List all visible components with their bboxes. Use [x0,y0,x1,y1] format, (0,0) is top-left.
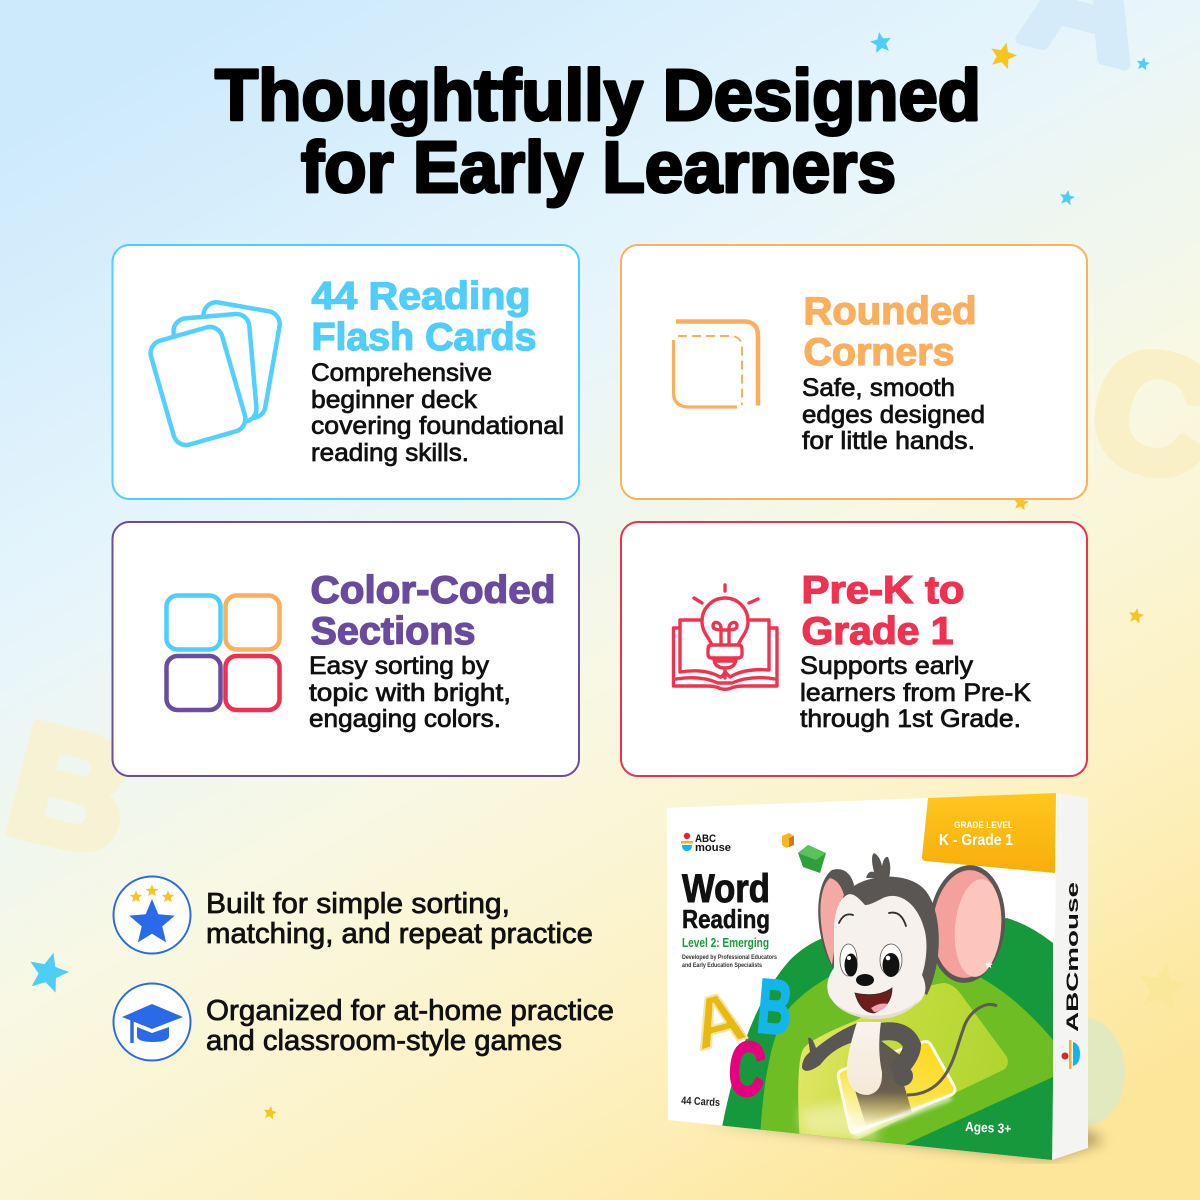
tail [907,1004,997,1095]
nose [856,974,874,986]
mouse mascot [802,853,1010,1126]
right ear [924,862,1010,986]
heading: Grade 1 [802,610,954,653]
cubes [782,833,826,873]
panel: 44 reading flash cards [112,245,579,499]
eyes [840,944,857,976]
box front [667,793,1057,1160]
title: for Early Learners [301,128,896,208]
text block: engaging colors. [309,705,501,733]
heading: Color-Coded [310,569,556,612]
text block [800,652,1031,733]
text: organized [206,995,614,1057]
face [827,894,926,1019]
tag: grade level: K - Grade 1 [939,832,1013,849]
box title: Developed by Professional Educators [682,955,778,961]
panel: rounded corners [621,245,1087,499]
logo: ABC mouse: mouse [695,842,731,854]
heading: Pre-K to [802,569,964,612]
text block: Supports early [800,652,974,680]
chin shadow [832,993,925,1019]
tag: grade level: GRADE LEVEL [954,820,1013,830]
text block: learners from Pre-K [800,679,1031,707]
title: Thoughtfully Designed [215,56,981,136]
text block: Safe, smooth [802,374,955,402]
box title: and Early Education Specialists [682,963,763,969]
heading: Corners [804,331,954,374]
icon: stars badge [114,876,190,954]
text block: topic with bright, [309,679,511,707]
left ear [818,869,854,968]
box title [682,867,778,969]
right arm [880,1031,912,1068]
text: sorting [206,888,593,950]
heading [804,290,976,374]
icon: rounded corner [674,322,758,407]
brows [839,913,906,926]
title [215,56,981,208]
side logo [1062,1040,1080,1069]
text block: covering foundational [311,412,564,440]
text block: Easy sorting by [309,652,490,680]
text: organized: and classroom-style games [206,1025,562,1057]
panel: color-coded sections [112,522,579,776]
tag: grade level [922,793,1056,873]
white base glow [852,1095,952,1138]
head [843,877,939,995]
heading: Rounded [804,290,976,333]
icon: book with lightbulb [674,585,777,689]
text block: edges designed [802,401,985,429]
letters A B C: C [725,1026,769,1113]
left arm [802,1022,862,1071]
text block [309,652,511,733]
text: ages: Ages 3+ [965,1119,1012,1136]
body [847,1022,882,1095]
text: sorting: Built for simple sorting, [206,888,510,920]
logo: ABC mouse [681,833,731,854]
box title: Word [682,867,770,911]
text block [802,374,985,455]
text block: beginner deck [311,386,478,414]
side text: ABCmouse [1063,882,1082,1032]
icon: four colored squares [166,596,280,710]
text: 44 cards: 44 Cards [681,1095,720,1109]
icon: graduation cap badge [114,984,190,1060]
heading [312,275,536,359]
tuft [866,853,890,878]
heading: Flash Cards [312,316,536,359]
box side [1052,793,1088,1160]
heading: Sections [310,610,476,653]
text block [311,359,564,467]
letters A B C [683,964,795,1113]
box title: Reading [682,904,770,934]
text block: for little hands. [802,427,975,455]
product box [667,793,1105,1165]
yellow flash card [838,1041,955,1133]
heading [310,569,556,653]
text: sorting: matching, and repeat practice [206,918,593,950]
text block: through 1st Grade. [800,705,1021,733]
icon: stack of flash cards [148,300,282,448]
panel: pre-k to grade 1 [621,522,1087,776]
mouth [855,988,892,1013]
text block: reading skills. [311,439,469,467]
box shadow [700,1122,1105,1160]
green hills artwork [722,918,1053,1165]
letters A B C: B [754,964,795,1051]
logo: ABC mouse: ABC [695,833,716,845]
heading [802,569,964,653]
letters A B C: A [683,975,754,1066]
heading: 44 Reading [312,275,530,318]
text: organized: Organized for at-home practice [206,995,614,1027]
legs [855,1040,912,1126]
sparkle [985,961,993,968]
text block: Comprehensive [311,359,492,387]
box title: Level 2: Emerging [682,936,769,950]
